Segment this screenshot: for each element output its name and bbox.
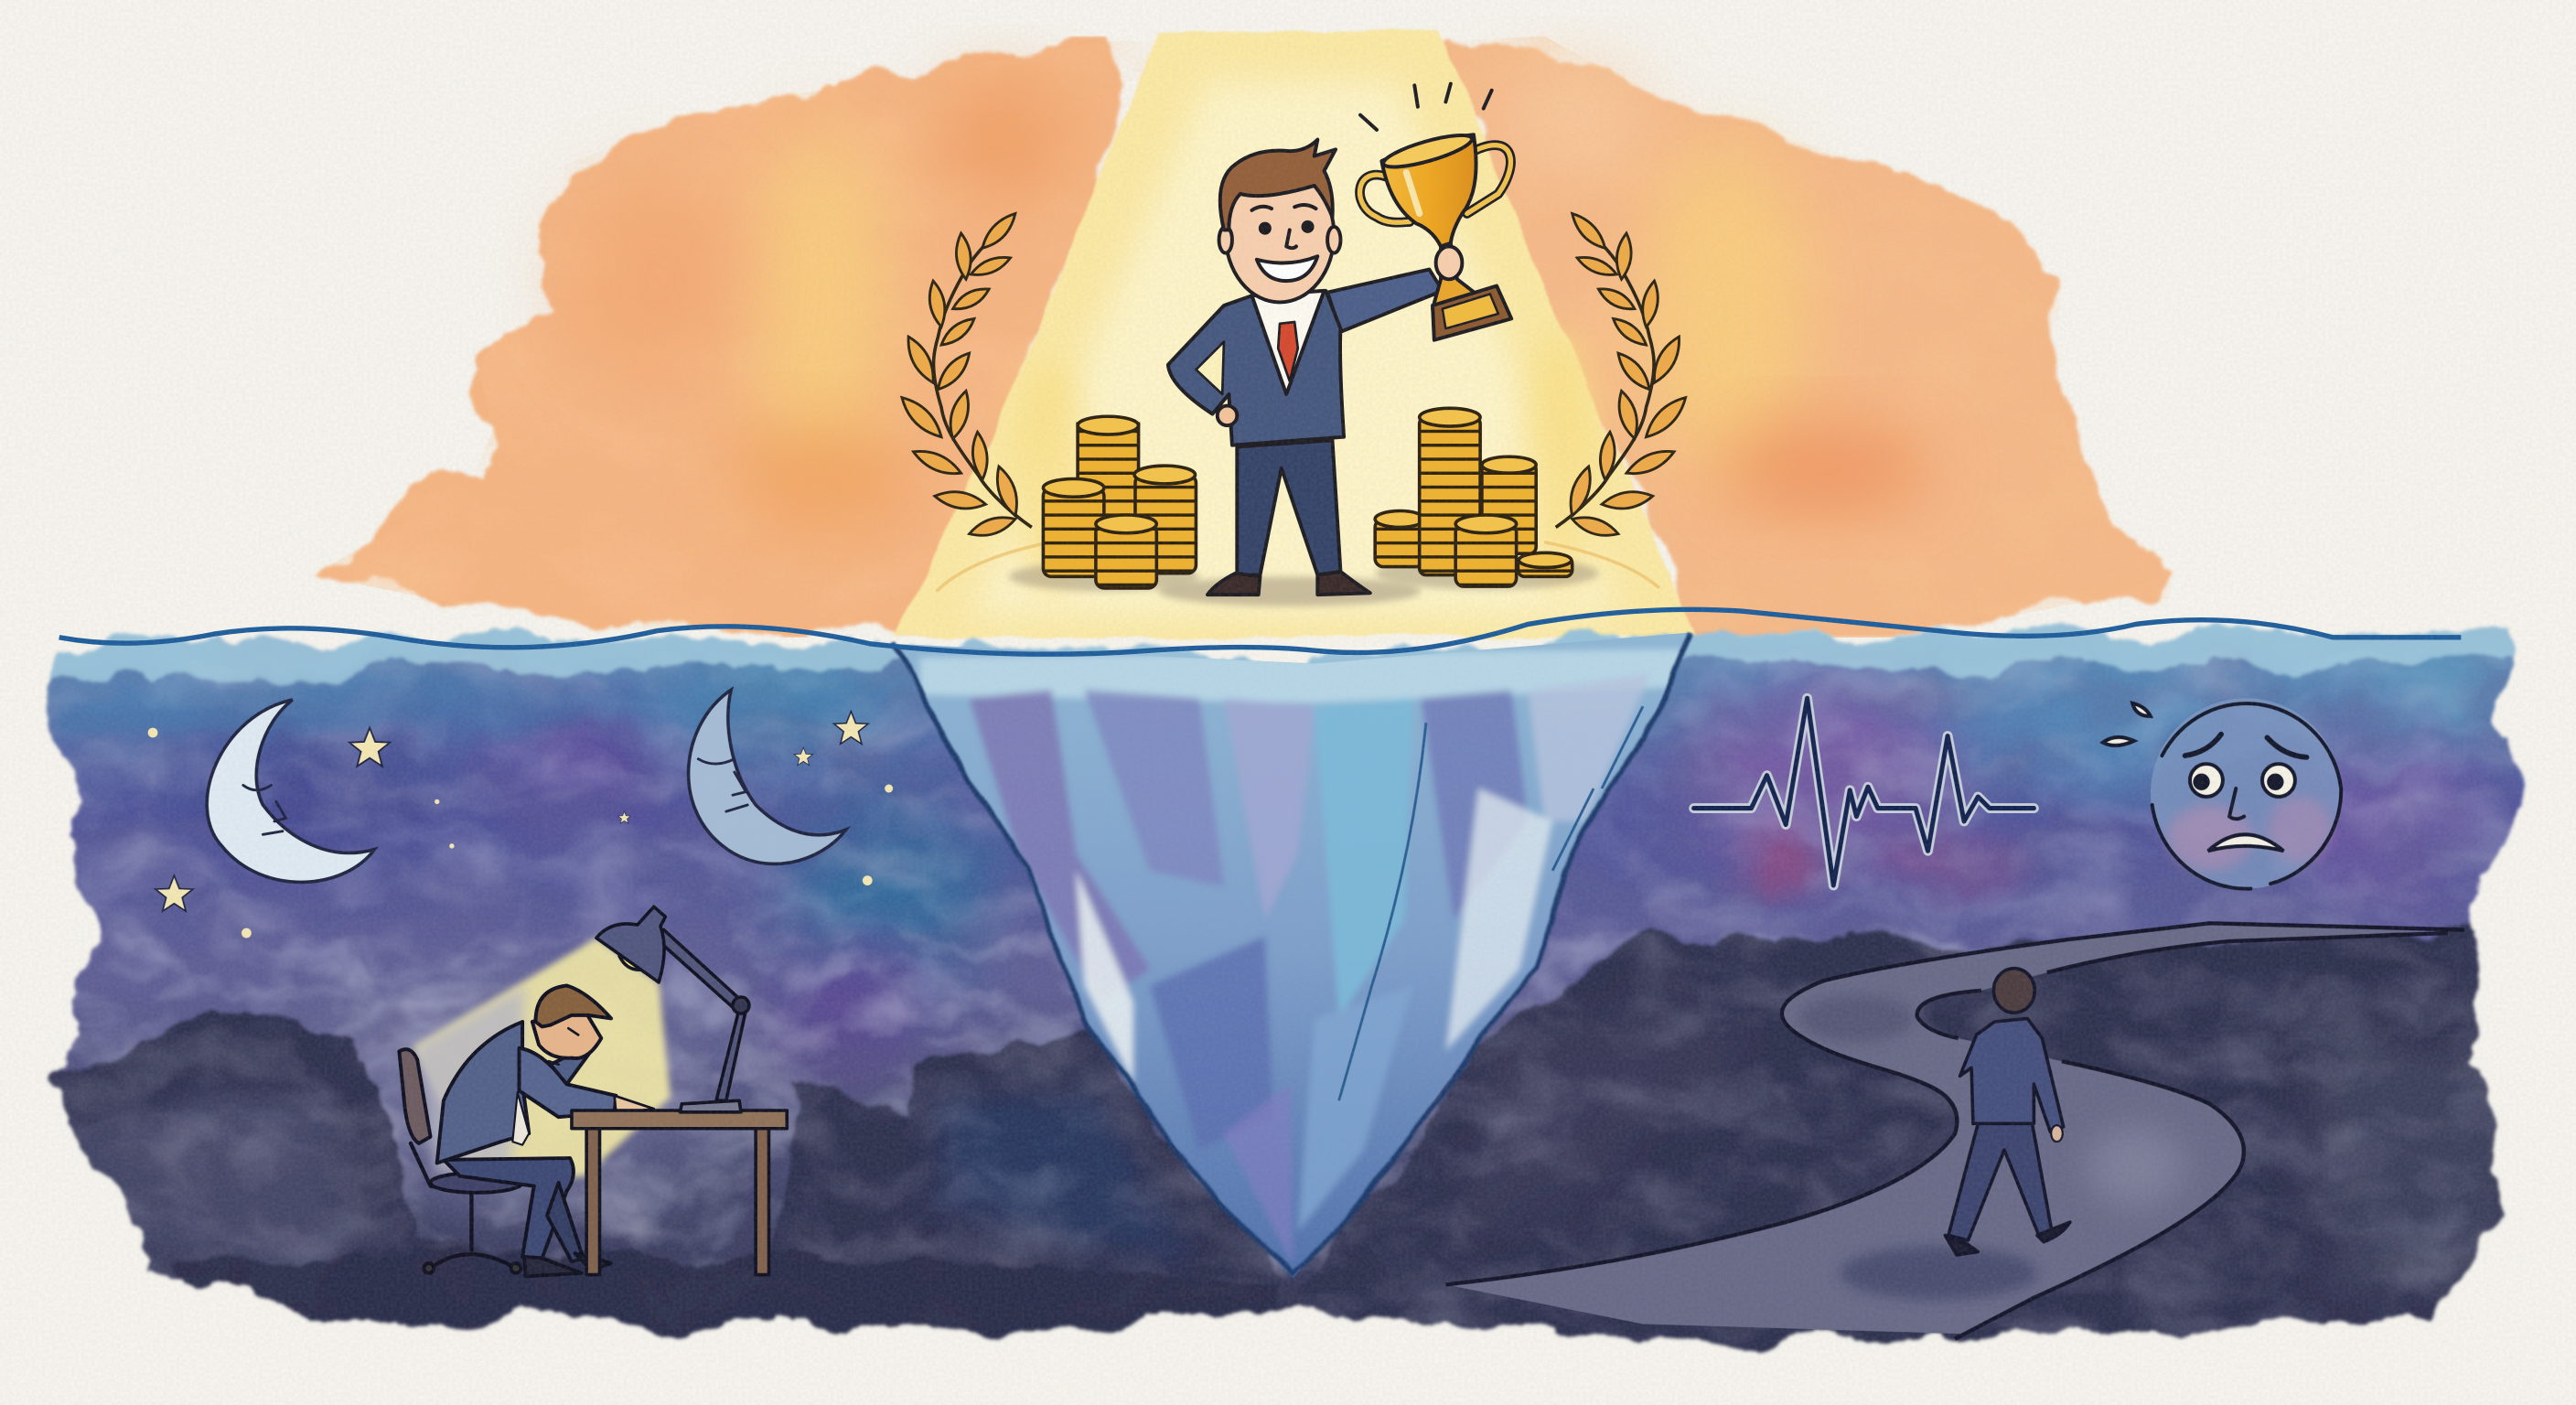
figure: man walking on road [1945,969,2070,1255]
arm [520,1048,616,1117]
stars and dots [148,712,893,938]
left orange wash [312,41,1131,632]
hand [2051,1125,2063,1142]
face features [1261,224,1270,233]
bottom floor strip [165,1251,1282,1339]
road edge lines [1445,923,2464,1339]
waterline [59,609,2461,654]
spotlight beam [897,29,1699,638]
desk lamp glow [414,938,671,1183]
dark seabed [33,923,2563,1364]
hand on hip [1218,406,1237,425]
iceberg crack lines [1339,706,1643,1100]
hair [1220,140,1336,230]
shoes [1945,1222,2070,1255]
shoes [1208,572,1370,595]
sweat drops [2103,703,2151,745]
figure: successful businessman [1168,84,1511,595]
iceberg facets [920,649,1692,1265]
iceberg [887,624,1709,1282]
legs [444,1158,574,1259]
underwater wash [0,607,2576,1364]
trophy cup [1381,134,1476,246]
icon: left crescent moon [207,700,374,882]
iceberg outline [896,632,1692,1278]
jacket and arms [1960,1018,2064,1132]
desk lamp [596,906,749,1112]
torso [437,1022,529,1163]
chair [399,1049,431,1143]
road dark patches [1799,995,1914,1042]
hair [535,986,611,1026]
trophy handles [1360,145,1510,222]
hand on keyboard [615,1096,654,1114]
icon: heartbeat line [1694,698,2034,885]
sea mottling [52,659,2512,941]
trophy sparkle lines [1360,84,1492,130]
jacket [1168,291,1344,445]
head [1993,969,2034,1013]
icon: left laurel [902,213,1032,535]
stage ring and shadows [937,542,1659,606]
arm gap [1196,342,1224,394]
raised hand [1436,246,1462,279]
icon: right coin stacks [1375,408,1572,586]
sea gradient [0,607,2576,1347]
surface light band [48,622,2517,688]
orange watercolor cloud [312,37,2177,638]
shirt and tie [1251,291,1325,394]
head [1226,167,1334,302]
icon: right laurel [1556,213,1686,535]
figure: exhausted man at desk [399,986,654,1276]
orange cloud tonal patches [295,25,2202,640]
winding road [1445,923,2464,1339]
raised arm [1327,270,1443,332]
shoes [524,1253,611,1276]
seabed mottling [0,937,2576,1347]
trophy base [1433,285,1511,340]
trophy stem [1433,243,1478,309]
icon: right crescent moon [689,690,846,863]
desk [572,1110,787,1275]
trousers [1237,440,1340,575]
trousers [1948,1123,2052,1240]
right orange wash [1443,37,2177,638]
face features [549,1028,578,1065]
icon: worried face [2103,698,2341,889]
head [532,1005,601,1058]
left fade of lamp glow [414,986,526,1183]
shirt [512,1092,529,1145]
colour patches [181,649,2514,1199]
icon: left coin stacks [1043,416,1196,588]
